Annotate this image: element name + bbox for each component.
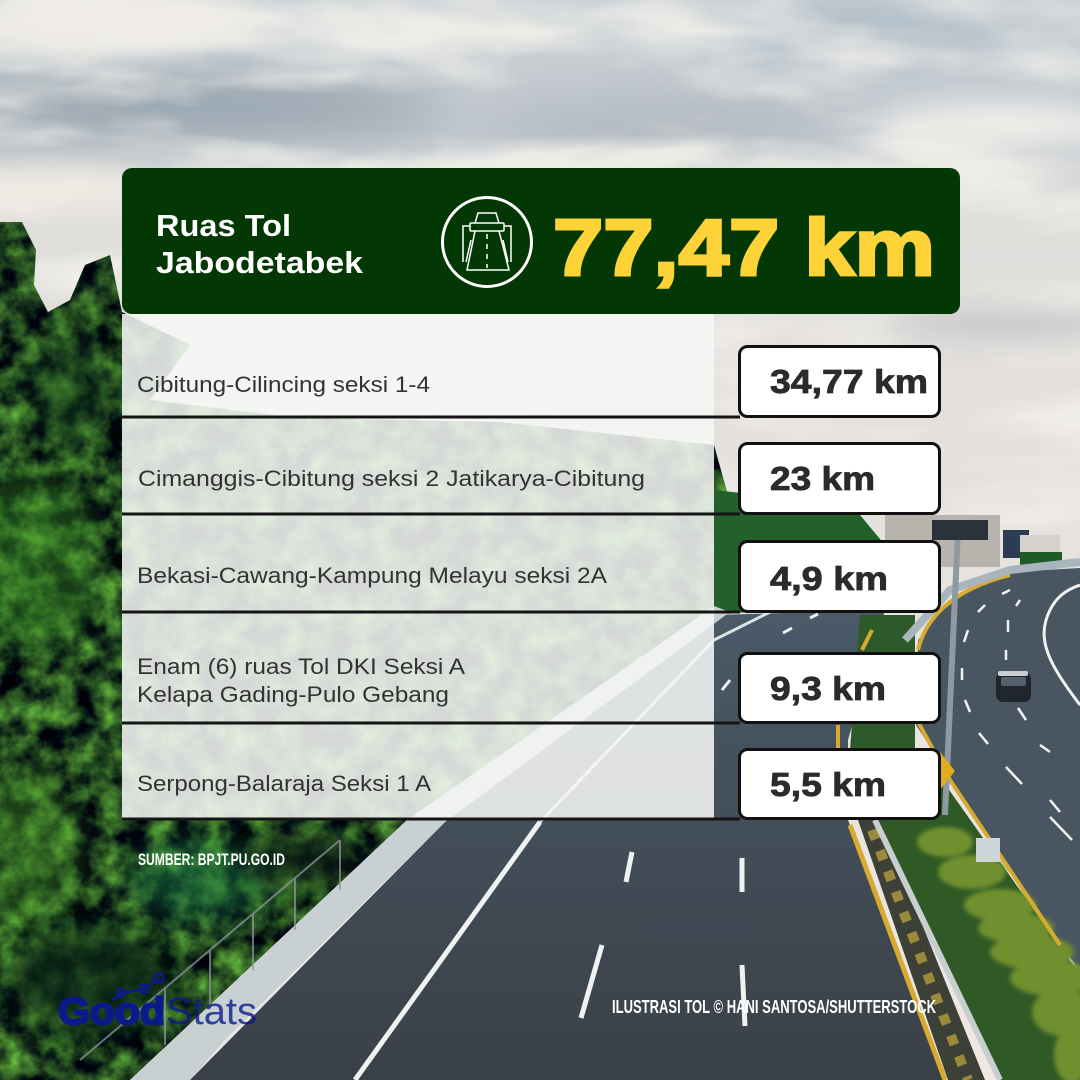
header title: Jabodetabek <box>156 245 364 280</box>
row 4: Enam ruas Tol DKI: Kelapa Gading-Pulo Gebang <box>137 682 449 707</box>
icon: toll road in circle <box>442 198 532 286</box>
guard rail <box>858 820 985 1080</box>
table panel background <box>122 314 714 820</box>
logo: GoodStats <box>58 974 257 1033</box>
row 4: Enam ruas Tol DKI <box>137 654 940 722</box>
row 3: Bekasi-Cawang-Kampung Melayu: 4,9 km <box>770 560 888 597</box>
row 5: Serpong-Balaraja: Serpong-Balaraja Seksi 1 A <box>137 771 431 796</box>
foreground tree foliage <box>0 200 760 1080</box>
row 4: Enam ruas Tol DKI: 9,3 km <box>770 670 886 707</box>
header bar <box>122 168 960 314</box>
concrete wall <box>130 606 730 1080</box>
car <box>996 671 1031 702</box>
row dividers <box>122 417 740 819</box>
logo: GoodStats: Stats <box>166 991 257 1033</box>
header title: Ruas Tol <box>156 208 291 243</box>
row 2: Cimanggis-Cibitung: Cimanggis-Cibitung seksi 2 Jatikarya-Cibitung <box>138 466 645 491</box>
row 1: Cibitung-Cilincing: Cibitung-Cilincing seksi 1-4 <box>137 372 430 397</box>
logo: GoodStats: Good <box>58 991 165 1033</box>
distant tree line <box>714 490 885 615</box>
row 4: Enam ruas Tol DKI: Enam (6) ruas Tol DKI Seksi A <box>137 654 465 679</box>
row 1: Cibitung-Cilincing <box>137 346 940 416</box>
row 1: Cibitung-Cilincing: 34,77 km <box>770 363 928 400</box>
row 2: Cimanggis-Cibitung <box>138 444 940 514</box>
row 3: Bekasi-Cawang-Kampung Melayu <box>137 542 940 612</box>
row 2: Cimanggis-Cibitung: 23 km <box>770 460 875 497</box>
median planting lower <box>870 770 1080 1080</box>
road lines <box>355 585 1080 1080</box>
source note: SUMBER: BPJT.PU.GO.ID <box>138 850 285 869</box>
total value: 77,47 km <box>553 203 935 292</box>
median planting upper <box>850 615 915 750</box>
main road <box>190 610 945 1080</box>
row 3: Bekasi-Cawang-Kampung Melayu: Bekasi-Cawang-Kampung Melayu seksi 2A <box>137 563 607 588</box>
street lamp and sign <box>945 530 958 815</box>
row 5: Serpong-Balaraja <box>137 750 940 818</box>
row 5: Serpong-Balaraja: 5,5 km <box>770 766 886 803</box>
photo credit: ILUSTRASI TOL © HANI SANTOSA/SHUTTERSTOCK <box>612 997 936 1017</box>
distant buildings <box>885 515 1000 567</box>
right road <box>916 568 1080 970</box>
roadside fence <box>80 840 340 1060</box>
